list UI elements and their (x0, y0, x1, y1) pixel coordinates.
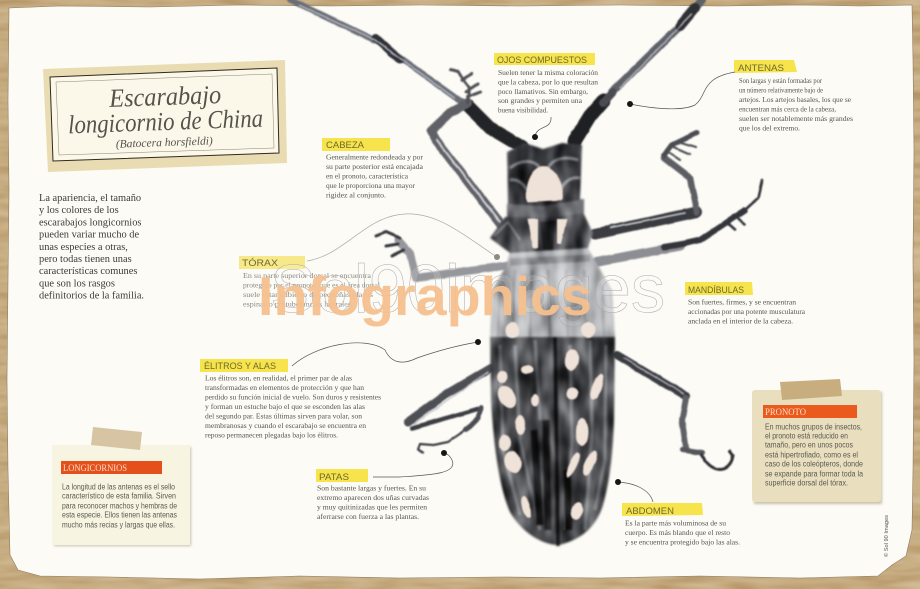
label: cabeza: en el pronoto, característica (326, 172, 409, 180)
label: ojos compuestos: buena visibilidad. (498, 106, 548, 115)
left antenna (290, 0, 522, 147)
panel: pronoto: En muchos grupos de insectos, (765, 422, 862, 432)
title text: Escarabajo (108, 80, 222, 113)
label: abdomen: cuerpo. Es más blando que el resto (625, 528, 730, 537)
label: cabeza: Generalmente redondeada y por (326, 152, 423, 162)
watermark: Sol90images (270, 251, 665, 327)
front left leg (431, 70, 503, 227)
label: patas: extremo aparecen dos uñas curvadas (317, 493, 429, 502)
label: torax: protegido por el pronoto, que es el área dorsal (243, 280, 380, 290)
label: abdomen: y se encuentra protegido bajo las alas. (625, 538, 740, 546)
label: elitros y alas: transformadas en elementos de protección y que han (205, 383, 364, 392)
title text: longicornio de China (68, 104, 263, 139)
label: antenas (734, 60, 853, 132)
neck band (507, 199, 584, 218)
rear left leg (408, 368, 491, 453)
middle right leg (596, 180, 762, 262)
beetle limbs (290, 0, 762, 469)
panel: pronoto: se expande para formar toda la (765, 470, 863, 478)
label: mandibulas (685, 282, 806, 326)
pronotum (faded band) (490, 248, 615, 337)
label: elitros y alas: ÉLITROS Y ALAS (204, 361, 276, 371)
label: ojos compuestos: Suelen tener la misma coloración (498, 68, 598, 77)
rear right leg (617, 355, 733, 469)
beetle pale markings (494, 166, 606, 521)
label: elitros y alas: del segundo par. Estas últimas sirven para volar, son (205, 412, 362, 420)
head (507, 143, 582, 206)
front right leg (595, 133, 697, 234)
intro text: pueden variar mucho de (39, 230, 139, 241)
title text (67, 79, 264, 152)
label: elitros y alas (200, 359, 381, 440)
panel heading: PRONOTO (765, 407, 806, 417)
label: mandibulas: anclada en el interior de la cabeza. (688, 316, 793, 326)
label: ojos compuestos: que la cabeza, por lo que resultan (498, 77, 598, 86)
label: ojos compuestos: son grandes y permiten una (498, 96, 583, 105)
intro text: definitorios de la familia. (39, 291, 144, 302)
label: torax: suele estar cubierto de pequeñas placas (243, 290, 373, 299)
label: elitros y alas: y forman un estuche bajo el que se esconden las alas (205, 402, 365, 411)
label: antenas: que los del extremo. (739, 124, 800, 132)
label: patas: PATAS (319, 472, 349, 482)
panel: pronoto: está hipertrofiado, como es el (765, 450, 858, 460)
label: patas: y muy quitinizadas que les permiten (317, 502, 427, 512)
intro text: pero todas tienen unas (39, 254, 132, 265)
label: abdomen: Es la parte más voluminosa de su (625, 518, 726, 528)
label: antenas: encuentran más cerca de la cabeza, (739, 104, 836, 114)
panel: longicornios: característico de esta familia. Sirven (62, 492, 176, 500)
panel: longicornios: La longitud de las antenas es el sello (62, 482, 175, 492)
label: antenas: suelen ser notablemente más grandes (739, 114, 853, 123)
panel: pronoto (752, 379, 882, 504)
panel: pronoto: superficie dorsal del tórax. (765, 478, 848, 488)
panel: longicornios: esta especie. Ellos tienen las antenas (62, 510, 177, 520)
label: antenas: artejos. Los artejos basales, los que se (739, 95, 852, 104)
label: ojos compuestos (494, 53, 598, 115)
panel: pronoto: caso de los coleópteros, donde (765, 460, 863, 468)
label: torax: En su parte superior dorsal se encuentra (243, 271, 372, 280)
intro text: características comunes (39, 266, 137, 277)
tape (780, 379, 842, 400)
intro text (39, 193, 144, 302)
leader dots (441, 101, 633, 485)
label: patas: Son bastante largas y fuertes. En su (317, 484, 426, 492)
label: torax: espinas o protuberancias laterales. (243, 300, 353, 308)
label: antenas: ANTENAS (738, 63, 784, 73)
panel: longicornios (52, 427, 191, 546)
intro text: La apariencia, el tamaño (39, 193, 141, 204)
label: cabeza: rigidez al conjunto. (326, 190, 386, 200)
label: mandibulas: Son fuertes, firmes, y se encuentran (688, 298, 796, 306)
label: abdomen (622, 503, 740, 546)
label: cabeza: su parte posterior está encajada (326, 162, 424, 171)
intro text: escarabajos longicornios (39, 217, 141, 228)
label: elitros y alas: reposo permanecen plegadas bajo los élitros. (205, 430, 338, 440)
label: cabeza: que le proporciona una mayor (326, 181, 415, 190)
label: cabeza: CABEZA (326, 140, 364, 150)
panel: longicornios: para reconocer machos y hembras de (62, 502, 177, 510)
label: patas (316, 469, 429, 521)
label: cabeza (322, 138, 424, 200)
label: elitros y alas: membranosas y cuando el escarabajo se encuentra en (205, 421, 366, 430)
intro text: unas especies a otras, (39, 242, 128, 253)
panel heading: LONGICORNIOS (63, 463, 127, 473)
label: mandibulas: accionadas por una potente musculatura (688, 307, 806, 316)
beetle body (490, 143, 615, 546)
title plaque (43, 60, 287, 172)
intro text: que son los rasgos (39, 278, 115, 289)
label: ojos compuestos: OJOS COMPUESTOS (497, 55, 587, 65)
label: elitros y alas: perdido su función inicial de vuelo. Son duros y resistentes (205, 392, 381, 402)
title text: (Batocera horsfieldi) (116, 135, 213, 151)
intro text: y los colores de los (39, 205, 119, 216)
watermark: Infographics (258, 265, 592, 327)
elytra (490, 337, 615, 546)
label: patas: aferrarse con fuerza a las plantas. (317, 512, 419, 521)
label: ojos compuestos: poco llamativos. Sin embargo, (498, 87, 588, 96)
right antenna (574, 0, 702, 142)
panel: pronoto: el pronoto está reducido en (765, 432, 848, 440)
label: torax: TÓRAX (242, 258, 278, 268)
label: torax (239, 256, 380, 308)
credit: © Sol 90 Images (883, 515, 890, 557)
thorax (490, 212, 593, 253)
tape (91, 427, 142, 450)
label: elitros y alas: Los élitros son, en realidad, el primer par de alas (205, 374, 352, 382)
middle left leg (376, 232, 510, 278)
label: antenas: un número relativamente bajo de (739, 86, 824, 94)
label: abdomen: ABDOMEN (626, 506, 674, 516)
leader lines (292, 72, 735, 502)
panel: longicornios: mucho más recias y largas que ellas. (62, 520, 175, 530)
label: mandibulas: MANDÍBULAS (688, 285, 744, 295)
label: antenas: Son largas y están formadas por (739, 76, 822, 85)
panel: pronoto: tamaño, pero en unos pocos (765, 440, 853, 450)
